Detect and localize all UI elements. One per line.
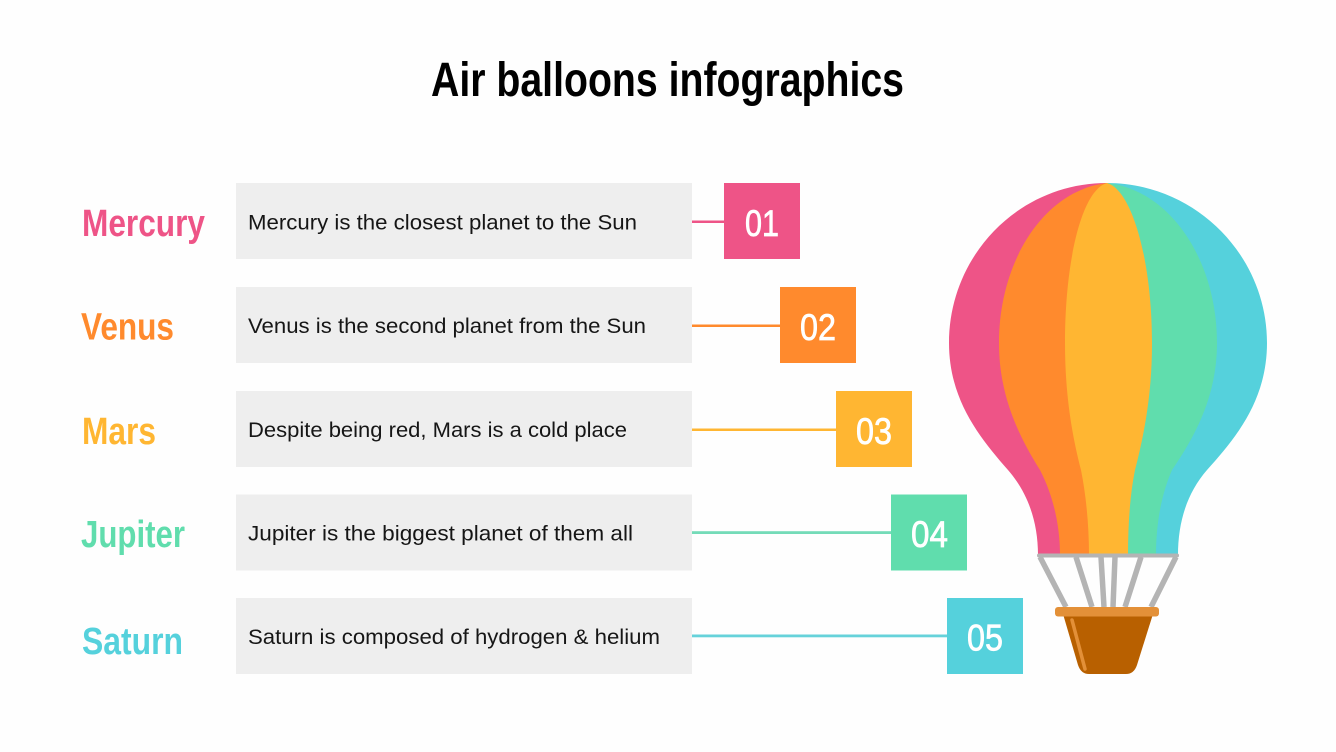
title: Air balloons infographics [431, 54, 904, 107]
label: Venus: Venus [81, 306, 174, 348]
number 02: 02 [800, 307, 836, 348]
number box 05 [947, 598, 1023, 674]
description: Saturn: Saturn is composed of hydrogen & helium [248, 625, 660, 649]
number box 03 [836, 391, 912, 467]
number box 01 [724, 183, 800, 259]
description: Mercury: Mercury is the closest planet to the Sun [248, 210, 637, 234]
ropes [1039, 556, 1177, 607]
label: Mercury: Mercury [82, 203, 205, 245]
basket [1055, 607, 1159, 674]
illustration: hot air balloon [949, 183, 1267, 674]
description: Jupiter: Jupiter is the biggest planet of them all [248, 522, 633, 546]
balloon envelope [949, 183, 1267, 555]
text box: Saturn [236, 598, 692, 674]
row: Jupiter [81, 494, 967, 570]
number 03: 03 [856, 411, 892, 452]
label: Mars: Mars [82, 411, 156, 453]
connector: Mercury [692, 220, 724, 223]
row: Venus [81, 287, 856, 363]
text box: Mars [236, 391, 692, 467]
number 05: 05 [967, 618, 1003, 658]
row: Mars [82, 391, 912, 467]
description: Mars: Despite being red, Mars is a cold place [248, 418, 627, 442]
description: Venus: Venus is the second planet from the Sun [248, 314, 646, 338]
number 04: 04 [911, 514, 948, 555]
row: Saturn [82, 598, 1023, 674]
number box 02 [780, 287, 856, 363]
label: Saturn: Saturn [82, 621, 183, 663]
connector: Venus [692, 324, 780, 327]
label: Jupiter: Jupiter [81, 514, 185, 556]
number 01: 01 [745, 203, 779, 244]
text box: Venus [236, 287, 692, 363]
text box: Mercury [236, 183, 692, 259]
connector: Saturn [692, 634, 947, 637]
row: Mercury [82, 183, 800, 259]
connector: Mars [692, 428, 836, 431]
text box: Jupiter [236, 494, 692, 570]
number box 04 [891, 494, 967, 570]
connector: Jupiter [692, 531, 891, 534]
